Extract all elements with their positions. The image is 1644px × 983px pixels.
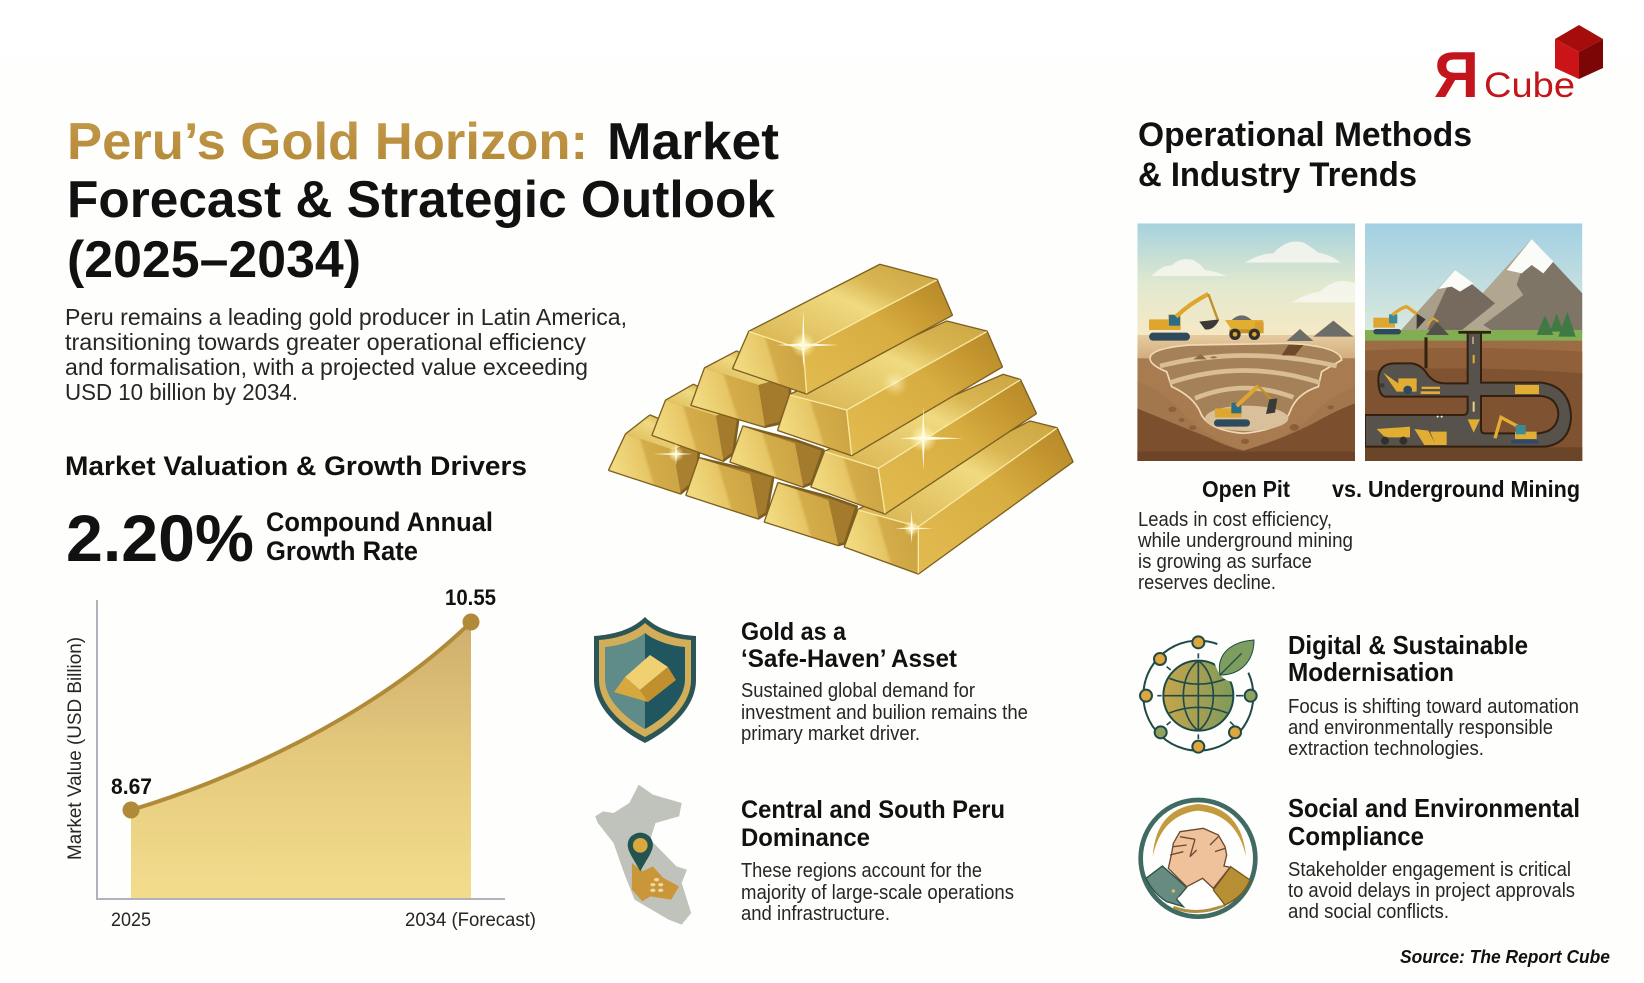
third row left bar <box>692 352 790 427</box>
block: social and environmental: Social and Environmental <box>1288 793 1580 823</box>
block: central and south Peru: majority of large-scale operations <box>741 882 1014 904</box>
logo letter: Я <box>1434 38 1479 111</box>
block: digital and sustainable: and environmentally responsible <box>1288 717 1553 739</box>
surface excavator <box>1373 307 1449 335</box>
block: safe haven: investment and builion remains the <box>741 702 1028 724</box>
mining description: Leads in cost efficiency, <box>1138 509 1332 531</box>
upper middle long bar <box>812 375 1036 513</box>
title: Peru’s Gold Horizon: <box>67 113 588 171</box>
heading: operational methods: & Industry Trends <box>1138 156 1417 194</box>
block: digital and sustainable: Focus is shifting toward automation <box>1288 696 1579 718</box>
panel labels: open pit vs underground: vs. Underground Mining <box>1332 476 1580 502</box>
CAGR statistic <box>66 501 493 575</box>
icon: shield with gold bar <box>594 617 696 743</box>
bottom row bar three <box>765 483 857 545</box>
intro paragraph: Peru remains a leading gold producer in Latin America, <box>65 304 627 330</box>
title: (2025–2034) <box>67 231 361 289</box>
mining description: reserves decline. <box>1138 572 1276 594</box>
title: Market <box>607 113 779 171</box>
intro paragraph: transitioning towards greater operational efficiency <box>65 329 586 355</box>
block: social and environmental: to avoid delays in project approvals <box>1288 880 1575 902</box>
icon: digital globe and leaf <box>1140 636 1257 753</box>
CAGR statistic: Compound Annual <box>266 507 493 537</box>
growth line <box>131 622 471 810</box>
end marker <box>462 614 480 630</box>
bottom row bar two <box>687 458 773 518</box>
intro paragraph <box>65 304 627 405</box>
block: social and environmental: and social conflicts. <box>1288 901 1449 923</box>
block: safe haven: ‘Safe-Haven’ Asset <box>741 645 958 673</box>
chart area fill <box>131 622 471 898</box>
block: central and south Peru: These regions account for the <box>741 860 982 882</box>
block: safe haven <box>741 618 1028 745</box>
icon: Peru map with pin <box>595 785 691 925</box>
mining description: is growing as surface <box>1138 551 1312 573</box>
intro paragraph: and formalisation, with a projected value exceeding <box>65 354 588 380</box>
heading: operational methods <box>1138 116 1472 194</box>
value 2034: 10.55 <box>445 585 496 610</box>
trees <box>1537 312 1576 337</box>
panel labels: open pit vs underground <box>1202 476 1580 502</box>
axes <box>97 600 505 899</box>
illustration: open pit mine <box>1137 223 1355 462</box>
title <box>67 113 779 289</box>
logo: RCube <box>1434 25 1603 111</box>
block: central and south Peru: and infrastructure. <box>741 903 890 925</box>
mining description: while underground mining <box>1137 530 1353 552</box>
block: digital and sustainable: Digital & Sustainable <box>1288 630 1528 660</box>
source credit: Source: The Report Cube <box>1400 947 1610 967</box>
block: safe haven: Sustained global demand for <box>741 680 975 702</box>
top long bar <box>733 265 952 393</box>
heading: market valuation: Market Valuation & Growth Drivers <box>65 451 527 481</box>
block: social and environmental <box>1288 793 1580 923</box>
underground truck <box>1377 427 1447 445</box>
mining description <box>1137 509 1353 594</box>
heading: operational methods: Operational Methods <box>1138 116 1472 154</box>
middle row bar <box>731 427 823 487</box>
intro paragraph: USD 10 billion by 2034. <box>65 379 298 405</box>
block: digital and sustainable <box>1288 630 1579 760</box>
dump truck <box>1225 315 1264 340</box>
block: central and south Peru: Central and South Peru <box>741 796 1005 824</box>
icon: handshake <box>1141 800 1255 917</box>
title: Forecast & Strategic Outlook <box>67 171 775 229</box>
value 2025: 8.67 <box>111 774 152 799</box>
logo cube <box>1555 25 1603 79</box>
block: digital and sustainable: extraction technologies. <box>1288 738 1484 760</box>
front long bar <box>845 422 1072 573</box>
area chart: market value <box>65 585 536 931</box>
second long bar <box>778 322 1002 455</box>
bottom row left bar <box>609 416 700 493</box>
block: safe haven: Gold as a <box>741 618 847 646</box>
x label 2025: 2025 <box>111 910 151 931</box>
CAGR statistic: Growth Rate <box>266 536 418 566</box>
block: central and south Peru: Dominance <box>741 824 870 852</box>
x label 2034: 2034 (Forecast) <box>405 910 536 931</box>
underground loader and stacks <box>1380 337 1539 433</box>
illustration: underground mine <box>1365 223 1582 462</box>
block: digital and sustainable: Modernisation <box>1288 657 1454 687</box>
panel labels: open pit vs underground: Open Pit <box>1202 476 1290 502</box>
logo word: Cube <box>1484 66 1575 105</box>
CAGR statistic: 2.20% <box>66 501 254 575</box>
y axis label: Market Value (USD Billion) <box>65 637 86 860</box>
block: social and environmental: Compliance <box>1288 821 1424 851</box>
block: central and south Peru <box>741 796 1014 925</box>
start marker <box>122 802 140 818</box>
block: social and environmental: Stakeholder engagement is critical <box>1288 859 1571 881</box>
underground excavator <box>1495 417 1538 444</box>
excavator in pit <box>1214 386 1277 427</box>
excavator surface <box>1149 294 1219 341</box>
second row left bar <box>653 385 740 461</box>
block: safe haven: primary market driver. <box>741 723 920 745</box>
rock piles <box>1287 321 1353 341</box>
icon: gold bar pyramid <box>609 265 1072 573</box>
sparkles <box>653 310 963 543</box>
